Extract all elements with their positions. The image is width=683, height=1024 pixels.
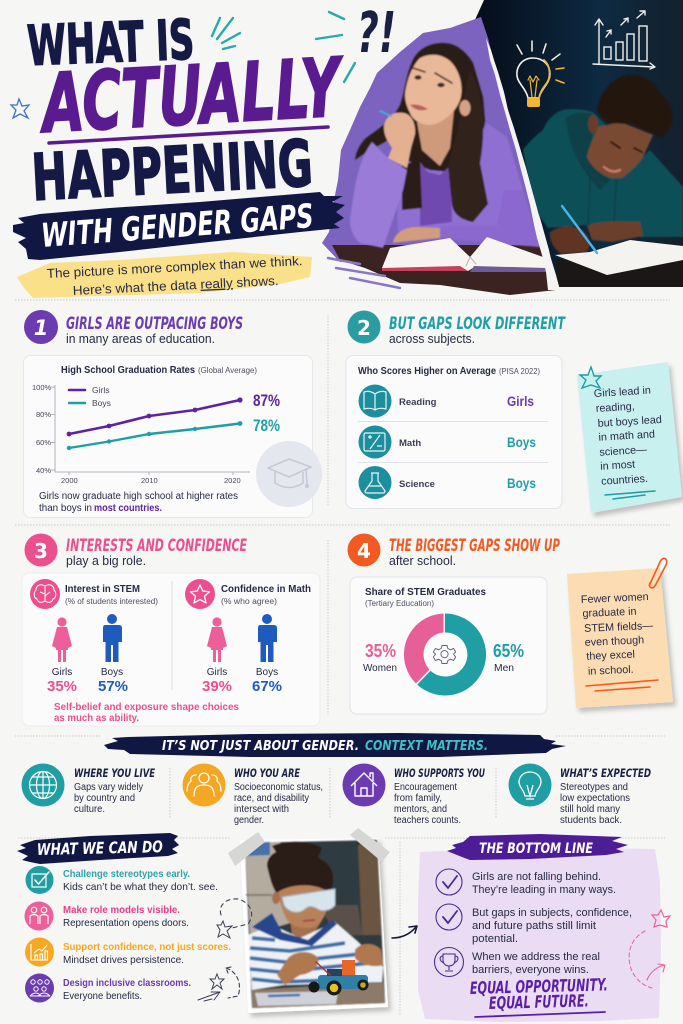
sticky note: orange: Fewer women [581,591,649,606]
block: interest in STEM [30,579,158,695]
title line: what is: WHAT IS [26,8,195,78]
icon: growth chart doodle [593,11,655,69]
icon: paper clip [649,558,667,588]
face details [611,142,642,152]
number badge 4 [348,534,380,566]
torn paper edge [486,38,560,290]
doodles around photo [198,899,252,1001]
table under girl [332,245,556,295]
row: reading [358,384,534,418]
context item: where you live: by country and [74,793,135,804]
context item: who you are: race, and disability [234,793,309,804]
icon: star [185,579,215,609]
card: interest and confidence [22,573,320,726]
row: math: Boys [507,435,536,450]
line chart: 2020 [224,476,241,485]
chart caption: Girls now graduate high school at higher rates [39,491,238,502]
photo frame [240,838,388,1013]
heading 2: BUT GAPS LOOK DIFFERENT [389,314,566,334]
number badge 3: 3 [34,539,48,563]
icon: boy figure [258,614,277,662]
context item: what's expected [508,764,651,826]
number badge 1 [24,310,58,344]
closing statement: EQUAL OPPORTUNITY. [470,975,608,999]
girl [350,43,540,248]
context item: who supports you: mentors, and [394,804,447,815]
point: everyone wins [434,948,600,976]
point: not falling behind: They’re leading in many ways. [472,884,616,896]
line chart: 100% [32,383,52,392]
line chart: 2000 [61,476,78,485]
card: graduation rate chart [24,356,322,518]
context item: who supports you [342,764,485,826]
context item: who you are: intersect with [234,804,289,815]
photo scene [245,840,385,1008]
value labels: 78% [253,416,280,435]
face [587,122,653,178]
panel: section 1 girls outpacing boys [24,310,322,518]
block: interest in STEM: (% of students interested) [65,597,158,606]
sticky note: teal: but boys lead [597,414,662,430]
context item: who supports you: from family, [394,793,442,804]
heading 3: INTERESTS AND CONFIDENCE [66,536,247,556]
panel: what we can do [17,833,231,1002]
action: inclusive classrooms: Design inclusive classrooms. [63,977,191,989]
banner: what we can do: WHAT WE CAN DO [37,837,163,859]
front hair strand [448,70,488,222]
chart caption [39,491,238,514]
heading 1 [66,314,243,346]
icon: girl figure [207,617,227,662]
hair [267,842,333,895]
tape: left [228,832,265,866]
mouth [410,104,428,110]
banner: what we can do [17,833,179,864]
action: role models: Representation opens doors. [63,917,189,929]
icon: graduation cap [256,441,322,507]
context item: what's expected: low expectations [560,793,630,804]
icon: girl figure [52,617,72,662]
mouth [303,920,315,921]
block: confidence in math: Boys [256,667,278,678]
hoodie body [397,123,540,247]
heading 3: play a big role. [66,554,146,568]
icon: teal star [580,367,601,388]
legend: Girls [92,385,109,395]
icon: gear [433,646,456,664]
action: challenge stereotypes: Kids can’t be what they don’t. see. [63,881,218,893]
doodle: pink star and arrow [629,910,670,988]
heading 1: GIRLS ARE OUTPACING BOYS [66,314,243,334]
face [278,885,328,928]
context item: where you live: Gaps vary widely [74,782,143,793]
donut labels: 65% [493,641,524,661]
line chart: 2010 [141,476,158,485]
title underline [49,127,328,143]
heading 4 [389,536,560,568]
action: support confidence: Support confidence, not just scores. [63,941,231,953]
donut chart [404,614,486,695]
context item: what's expected: WHAT’S EXPECTED [560,766,651,780]
icon: brain [30,579,60,609]
sticky note: orange: graduate in [582,606,637,620]
banner: context matters: IT’S NOT JUST ABOUT GENDER. [162,738,359,754]
action: challenge stereotypes: Challenge stereotypes early. [63,868,190,880]
icon: globe [22,764,64,806]
pencil [380,111,391,116]
purple brush behind girl [322,17,549,262]
line chart: 80% [36,410,51,419]
block: confidence in math: 67% [252,678,282,695]
neck [290,918,322,940]
legend: Boys [92,398,111,408]
number badge 2 [348,310,380,344]
row: reading: Girls [507,394,534,409]
point: gaps limit potential: But gaps in subjects, confidence, [472,907,632,919]
context item: who you are: WHO YOU ARE [234,766,300,780]
block: interest in STEM: Boys [101,667,123,678]
value labels [253,391,280,435]
card: share of STEM graduates: Share of STEM Graduates [365,586,486,598]
hoodie [523,109,683,237]
point: gaps limit potential [436,904,632,945]
number badge 4: 4 [357,539,371,563]
row: reading: Reading [399,397,437,408]
second hand [587,222,643,242]
context item: where you live [22,764,155,815]
block: confidence in math: Confidence in Math [221,584,311,595]
hands [277,952,318,985]
heading 2: across subjects. [389,332,475,346]
open book [382,237,547,272]
context item: what's expected: Stereotypes and [560,782,628,793]
point: everyone wins: barriers, everyone wins. [472,964,589,976]
action: support confidence [25,938,231,966]
line chart: 60% [36,438,51,447]
number badge 1: 1 [34,316,48,340]
icon: boy figure [103,614,122,662]
sticky note: orange: they excel [586,649,635,663]
point: not falling behind [436,869,616,896]
icon: idea bulb [508,764,552,806]
face [405,55,462,125]
context item: who supports you: teachers counts. [394,815,461,826]
doodle: teal spark marks [212,12,355,82]
donut labels [363,641,524,674]
context item: who supports you: WHO SUPPORTS YOU [394,766,485,780]
card: who scores higher [346,356,562,508]
donut labels: Men [494,663,514,674]
hero illustration: two students [322,0,683,295]
action: inclusive classrooms: Everyone benefits. [63,990,142,1002]
row: math [358,426,536,458]
context item: where you live: WHERE YOU LIVE [74,766,155,780]
closing statement: EQUAL FUTURE. [489,991,589,1014]
banner: bottom line [447,834,628,860]
panel: section 4 biggest gaps [348,534,673,714]
ear [460,100,470,116]
chart caption: than boys in [39,503,92,514]
block: confidence in math: 39% [202,678,232,695]
context item: who you are: Socioeconomic status, [234,782,323,793]
point: not falling behind: Girls are not falling behind. [472,871,601,883]
thinking hand [384,113,415,168]
icon: people [182,764,226,806]
chart title: High School Graduation Rates [61,364,195,376]
chart caption: most countries. [94,503,162,514]
shirt [248,922,383,990]
left sleeve [350,142,407,248]
doodle: blue star [11,99,29,118]
block: confidence in math: (% who agree) [221,597,277,606]
eyes and brows [413,68,452,83]
sticky note: teal: in math and [598,428,655,444]
heading 4: after school. [389,554,456,568]
context item: what's expected: students back. [560,815,622,826]
row: science: Boys [507,476,536,491]
block: interest in STEM: 35% [47,678,77,695]
dark study background [474,0,683,287]
pen [562,206,597,253]
heading 1: in many areas of education. [66,332,215,346]
line chart [32,383,280,485]
block: interest in STEM: 57% [98,678,128,695]
table [252,982,385,1008]
subtitle on yellow brush: Here’s what the data really shows. [72,273,279,298]
donut labels: Women [363,663,397,674]
card: share of STEM graduates: (Tertiary Education) [365,599,434,608]
number badge 2: 2 [357,316,371,340]
arrow: photo to bottom line [392,926,417,938]
heading 4: THE BIGGEST GAPS SHOW UP [389,536,560,556]
block: confidence in math [185,579,311,695]
sticky note: orange: in school. [588,664,634,678]
card: share of STEM graduates [350,577,547,714]
sticky note: teal: Girls lead in [594,385,651,400]
hair back [355,43,487,221]
doodle: question and exclamation marks: ?! [357,1,396,66]
table right [556,255,683,287]
panel: the bottom line [418,834,670,1022]
panel background [418,848,661,1022]
banner: context matters: CONTEXT MATTERS. [365,738,488,754]
banner: context matters [104,733,566,757]
chart title: (Global Average) [198,366,257,375]
card title: (PISA 2022) [499,367,540,376]
hood [252,913,337,946]
action: role models [24,902,189,930]
panel: section 2 subject gaps [346,310,682,513]
number badge 3 [24,534,58,566]
curly hair [597,75,672,138]
banner: bottom line: THE BOTTOM LINE [479,841,593,857]
context item: who supports you: Encouragement [394,782,457,793]
donut labels: 35% [365,641,396,661]
action: support confidence: Mindset drives persistence. [63,954,184,966]
block: interest in STEM: Girls [52,667,72,678]
row: math: Math [399,438,421,449]
sticky note: orange: even though [584,634,644,649]
icon: house [342,764,386,806]
subtitle on yellow brush [17,252,312,298]
notebook [555,240,683,275]
title line: happening: HAPPENING [30,127,314,216]
context item: who you are [182,764,323,826]
point: everyone wins: When we address the real [472,951,600,963]
context item: who you are: gender. [234,815,264,826]
title line: actually: ACTUALLY [36,41,348,152]
value labels: 87% [253,391,280,410]
block: confidence in math: Girls [207,667,227,678]
action: role models: Make role models visible. [63,904,180,916]
action: inclusive classrooms [25,974,191,1002]
legend [69,385,111,408]
heading 3 [66,536,247,568]
photo: girl building a robot [228,828,390,1013]
block: interest in STEM: Interest in STEM [65,584,140,595]
right sleeve [440,190,540,247]
tape: right [350,828,390,862]
row: science: Science [399,479,435,490]
sticky note: teal [577,362,682,513]
neck [417,110,454,166]
writing hand [550,226,589,254]
card title: Who Scores Higher on Average [358,365,496,377]
point: gaps limit potential: potential. [472,933,518,945]
banner: with gender gaps: WITH GENDER GAPS [40,196,315,255]
subtitle on yellow brush: The picture is more complex than we think. [46,253,303,281]
banner: with gender gaps [13,192,345,260]
sticky note: teal: science— [599,444,647,459]
card note [54,701,239,724]
sticky note: teal: in most [600,459,635,473]
boy [523,75,683,254]
point: gaps limit potential: and future paths still limit [472,920,596,932]
card note: Self-belief and exposure shape choices [54,701,239,713]
icon: light bulb [517,41,564,107]
row: science [358,466,536,499]
context item: where you live: culture. [74,804,105,815]
sticky note: teal: countries. [601,473,648,488]
sticky note: teal: reading, [595,401,635,415]
robot car [308,960,368,996]
title [26,8,348,216]
panel: section 3 interests and confidence [22,534,320,726]
lower hand [393,227,440,243]
card note: as much as ability. [54,712,139,724]
goggles [282,889,335,912]
action: challenge stereotypes [26,866,218,894]
sticky note: orange [567,558,673,708]
line chart: 40% [36,466,51,475]
context item: what's expected: still hold many [560,804,620,815]
closing statement [470,975,608,1017]
heading 2 [389,314,566,346]
sticky note: orange: STEM fields— [584,620,654,635]
